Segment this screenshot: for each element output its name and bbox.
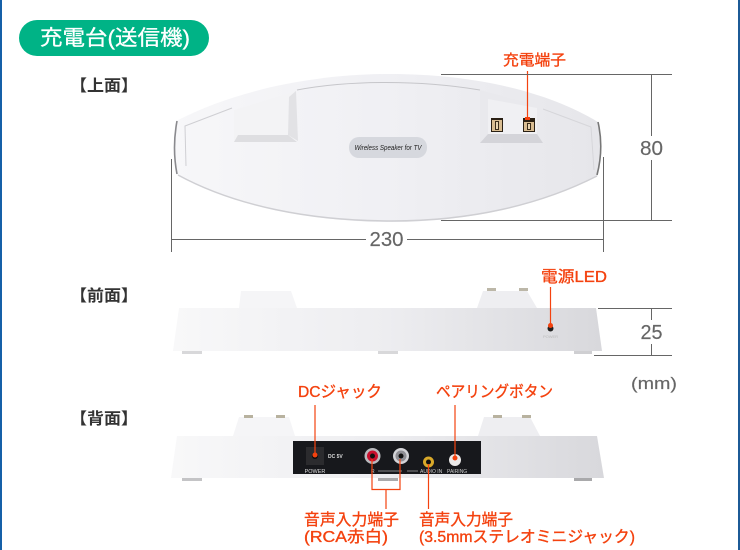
product badge: Wireless Speaker for TV [354,143,422,152]
back view: charging base [171,415,604,481]
product badge [349,137,427,158]
icon: terminal [523,118,535,132]
connector panel: PAIRING [447,469,467,475]
callout: RCA audio input: 音声入力端子 [304,511,399,529]
connector panel: R [371,469,375,475]
callout: power LED: 電源LED [541,268,607,286]
dimension: width 230: 230 [370,229,404,251]
callout: charging terminal: 充電端子 [503,52,566,69]
callout: pairing button: ペアリングボタン [436,383,553,401]
dimension: height 25 [594,308,672,356]
callout: RCA audio input: (RCA赤白) [304,528,388,546]
dimension: depth 80: 80 [640,138,663,160]
callout: 3.5mm audio input: 音声入力端子 [419,511,513,529]
callout: charging terminal [503,52,566,120]
callout: DC jack: DCジャック [298,383,382,401]
connector panel [293,441,481,475]
dimension: width 230 [171,157,604,252]
front view: charging base: POWER [543,334,558,339]
title pill: 充電台(送信機) [40,27,190,50]
right speaker mount with charging terminals [480,90,543,143]
connector panel: DC 5V [328,454,343,460]
callout: RCA audio input [304,459,400,546]
connector panel: AUDIO IN [420,469,443,475]
icon: power LED [548,326,554,332]
title pill [19,20,209,56]
callout: power LED [541,268,607,328]
heading: back view: 【背面】 [70,410,138,428]
heading: front view: 【前面】 [70,286,138,305]
left speaker mount [234,91,298,142]
callout: 3.5mm audio input: (3.5mmステレオミニジャック) [419,528,635,546]
connector panel: POWER [305,469,325,475]
callout: DC jack [298,383,382,458]
callout: 3.5mm audio input [419,464,635,546]
unit label: (mm) [631,374,677,393]
icon: terminal [491,118,503,132]
dimension: depth 80 [441,74,672,220]
front view: charging base [173,288,602,354]
heading: top view: 【上面】 [70,77,138,95]
top view: charging base [174,74,601,222]
dimension: height 25: 25 [640,322,662,344]
callout: pairing button [436,383,553,460]
